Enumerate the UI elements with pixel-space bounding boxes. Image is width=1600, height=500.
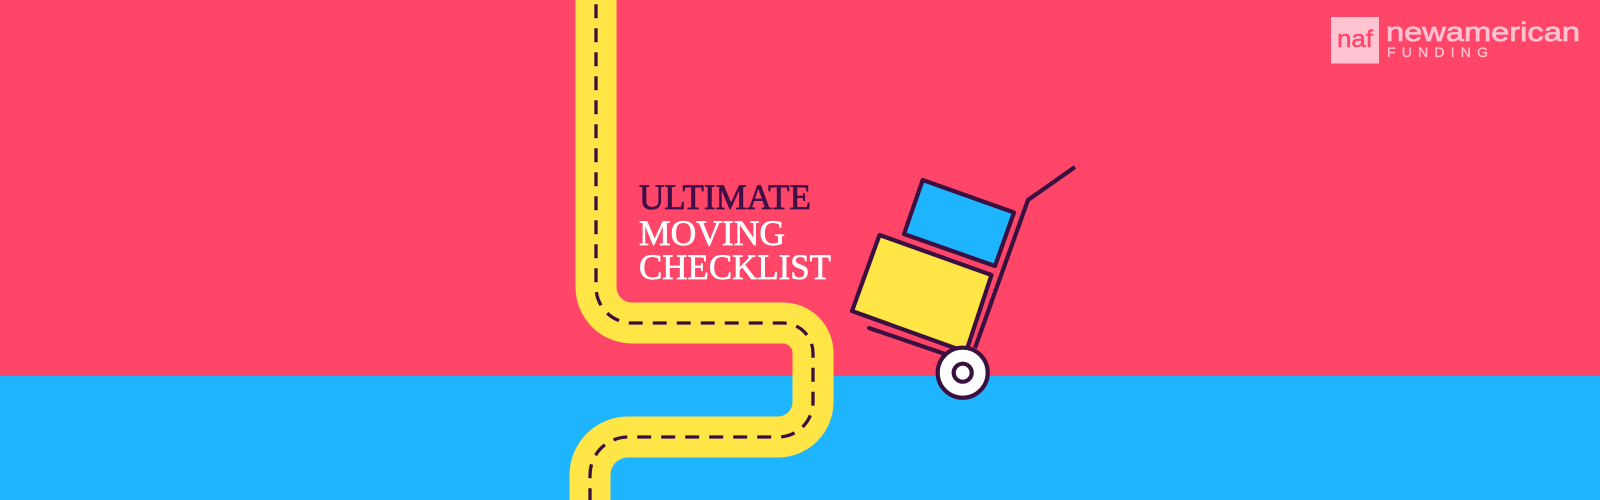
panel: red upper background — [0, 0, 1600, 376]
road surface — [590, 0, 813, 500]
wheel hub — [954, 364, 972, 382]
wheel outer — [938, 348, 988, 398]
icon: hand truck with boxes — [852, 167, 1075, 398]
wheel — [938, 348, 988, 398]
blue box — [904, 180, 1014, 266]
hand truck frame and handle — [975, 167, 1075, 348]
logo wordmark: newamerican — [1386, 17, 1580, 47]
logo subtitle: FUNDING — [1387, 44, 1488, 60]
title line: checklist: CHECKLIST — [639, 247, 831, 287]
logo square — [1331, 17, 1379, 64]
hand truck base plate — [869, 328, 945, 354]
panel: blue lower background — [0, 376, 1600, 500]
title line: moving: MOVING — [639, 213, 785, 253]
road centre dashed line — [590, 0, 813, 500]
title — [639, 177, 831, 287]
logo: New American Funding — [1331, 17, 1580, 64]
yellow box — [852, 235, 992, 352]
winding yellow road — [590, 0, 813, 500]
title line: ultimate: ULTIMATE — [639, 177, 811, 217]
logo square text: naf — [1337, 26, 1373, 53]
